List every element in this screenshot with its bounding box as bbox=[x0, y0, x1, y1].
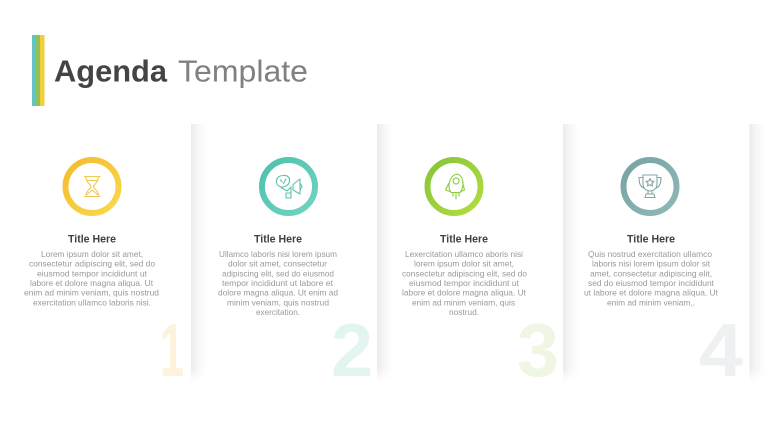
title bbox=[54, 54, 308, 88]
text block: step 2: tempor incididunt ut labore et bbox=[222, 278, 334, 288]
icon: rocket bbox=[428, 160, 480, 213]
icon: megaphone bbox=[262, 160, 315, 213]
text block: step 4: ut labore et dolore magna aliqua. Ut bbox=[584, 288, 719, 298]
text block: step 1: consectetur adipiscing elit, sed do bbox=[29, 259, 155, 269]
text block: step 2: dolor sit amet, consectetur bbox=[228, 259, 327, 269]
text block: step 2: dolore magna aliqua. Ut enim ad bbox=[218, 288, 338, 298]
text block: step 4: amet, consectetur adipiscing elit, bbox=[590, 268, 712, 278]
text block: step 3: lorem ipsum dolor sit amet, bbox=[414, 259, 514, 269]
text block: step 1: Lorem ipsum dolor sit amet, bbox=[41, 249, 143, 259]
number 2: 2 bbox=[331, 308, 373, 392]
panel: step 2 bbox=[218, 124, 393, 392]
panel: step 3 bbox=[402, 124, 579, 392]
number 4: 4 bbox=[699, 308, 743, 392]
number 3: 3 bbox=[517, 308, 559, 392]
text block: step 4: Quis nostrud exercitation ullamco bbox=[588, 249, 712, 259]
icon: trophy bbox=[624, 160, 676, 213]
text block: step 1: enim ad minim veniam, quis nostrud bbox=[24, 288, 159, 298]
text block: step 2: exercitation. bbox=[256, 307, 300, 317]
text block: step 4 bbox=[584, 249, 719, 307]
text block: step 1: exercitation ullamco laboris nisi. bbox=[33, 297, 151, 307]
title: Agenda bbox=[54, 54, 168, 88]
heading: step 4: Title Here bbox=[627, 234, 675, 246]
text block: step 4: laboris nisi lorem ipsum dolor sit bbox=[592, 259, 711, 269]
number 1: 1 bbox=[160, 308, 184, 392]
text block: step 1: labore et dolore magna aliqua. Ut bbox=[30, 278, 154, 288]
text block: step 3: eiusmod tempor incididunt ut bbox=[409, 278, 520, 288]
text block: step 4: sed do eiusmod tempor incididunt bbox=[588, 278, 715, 288]
accent bar bbox=[32, 35, 44, 106]
text block: step 2: minim veniam, quis nostrud bbox=[227, 297, 329, 307]
text block: step 3: enim ad minim veniam, quis bbox=[412, 297, 515, 307]
icon: hourglass bbox=[66, 160, 118, 213]
text block: step 3: labore et dolore magna aliqua. Ut bbox=[402, 288, 527, 298]
title: Template bbox=[178, 54, 308, 88]
text block: step 2: adipiscing elit, sed do eiusmod bbox=[222, 268, 334, 278]
panel: step 4 bbox=[584, 124, 766, 392]
heading: step 1: Title Here bbox=[68, 234, 116, 246]
heading: step 2: Title Here bbox=[254, 234, 302, 246]
panel: step 1 bbox=[24, 124, 207, 392]
text block: step 2: Ullamco laboris nisi lorem ipsum bbox=[219, 249, 337, 259]
heading: step 3: Title Here bbox=[440, 234, 488, 246]
text block: step 4: enim ad minim veniam,. bbox=[607, 297, 695, 307]
text block: step 3: Lexercitation ullamco aboris nisi bbox=[405, 249, 523, 259]
text block: step 1 bbox=[24, 249, 159, 307]
text block: step 2 bbox=[218, 249, 338, 317]
text block: step 3: consectetur adipiscing elit, sed do bbox=[402, 268, 527, 278]
text block: step 3 bbox=[402, 249, 527, 317]
text block: step 1: eiusmod tempor incididunt ut bbox=[37, 268, 148, 278]
text block: step 3: nostrud. bbox=[449, 307, 479, 317]
